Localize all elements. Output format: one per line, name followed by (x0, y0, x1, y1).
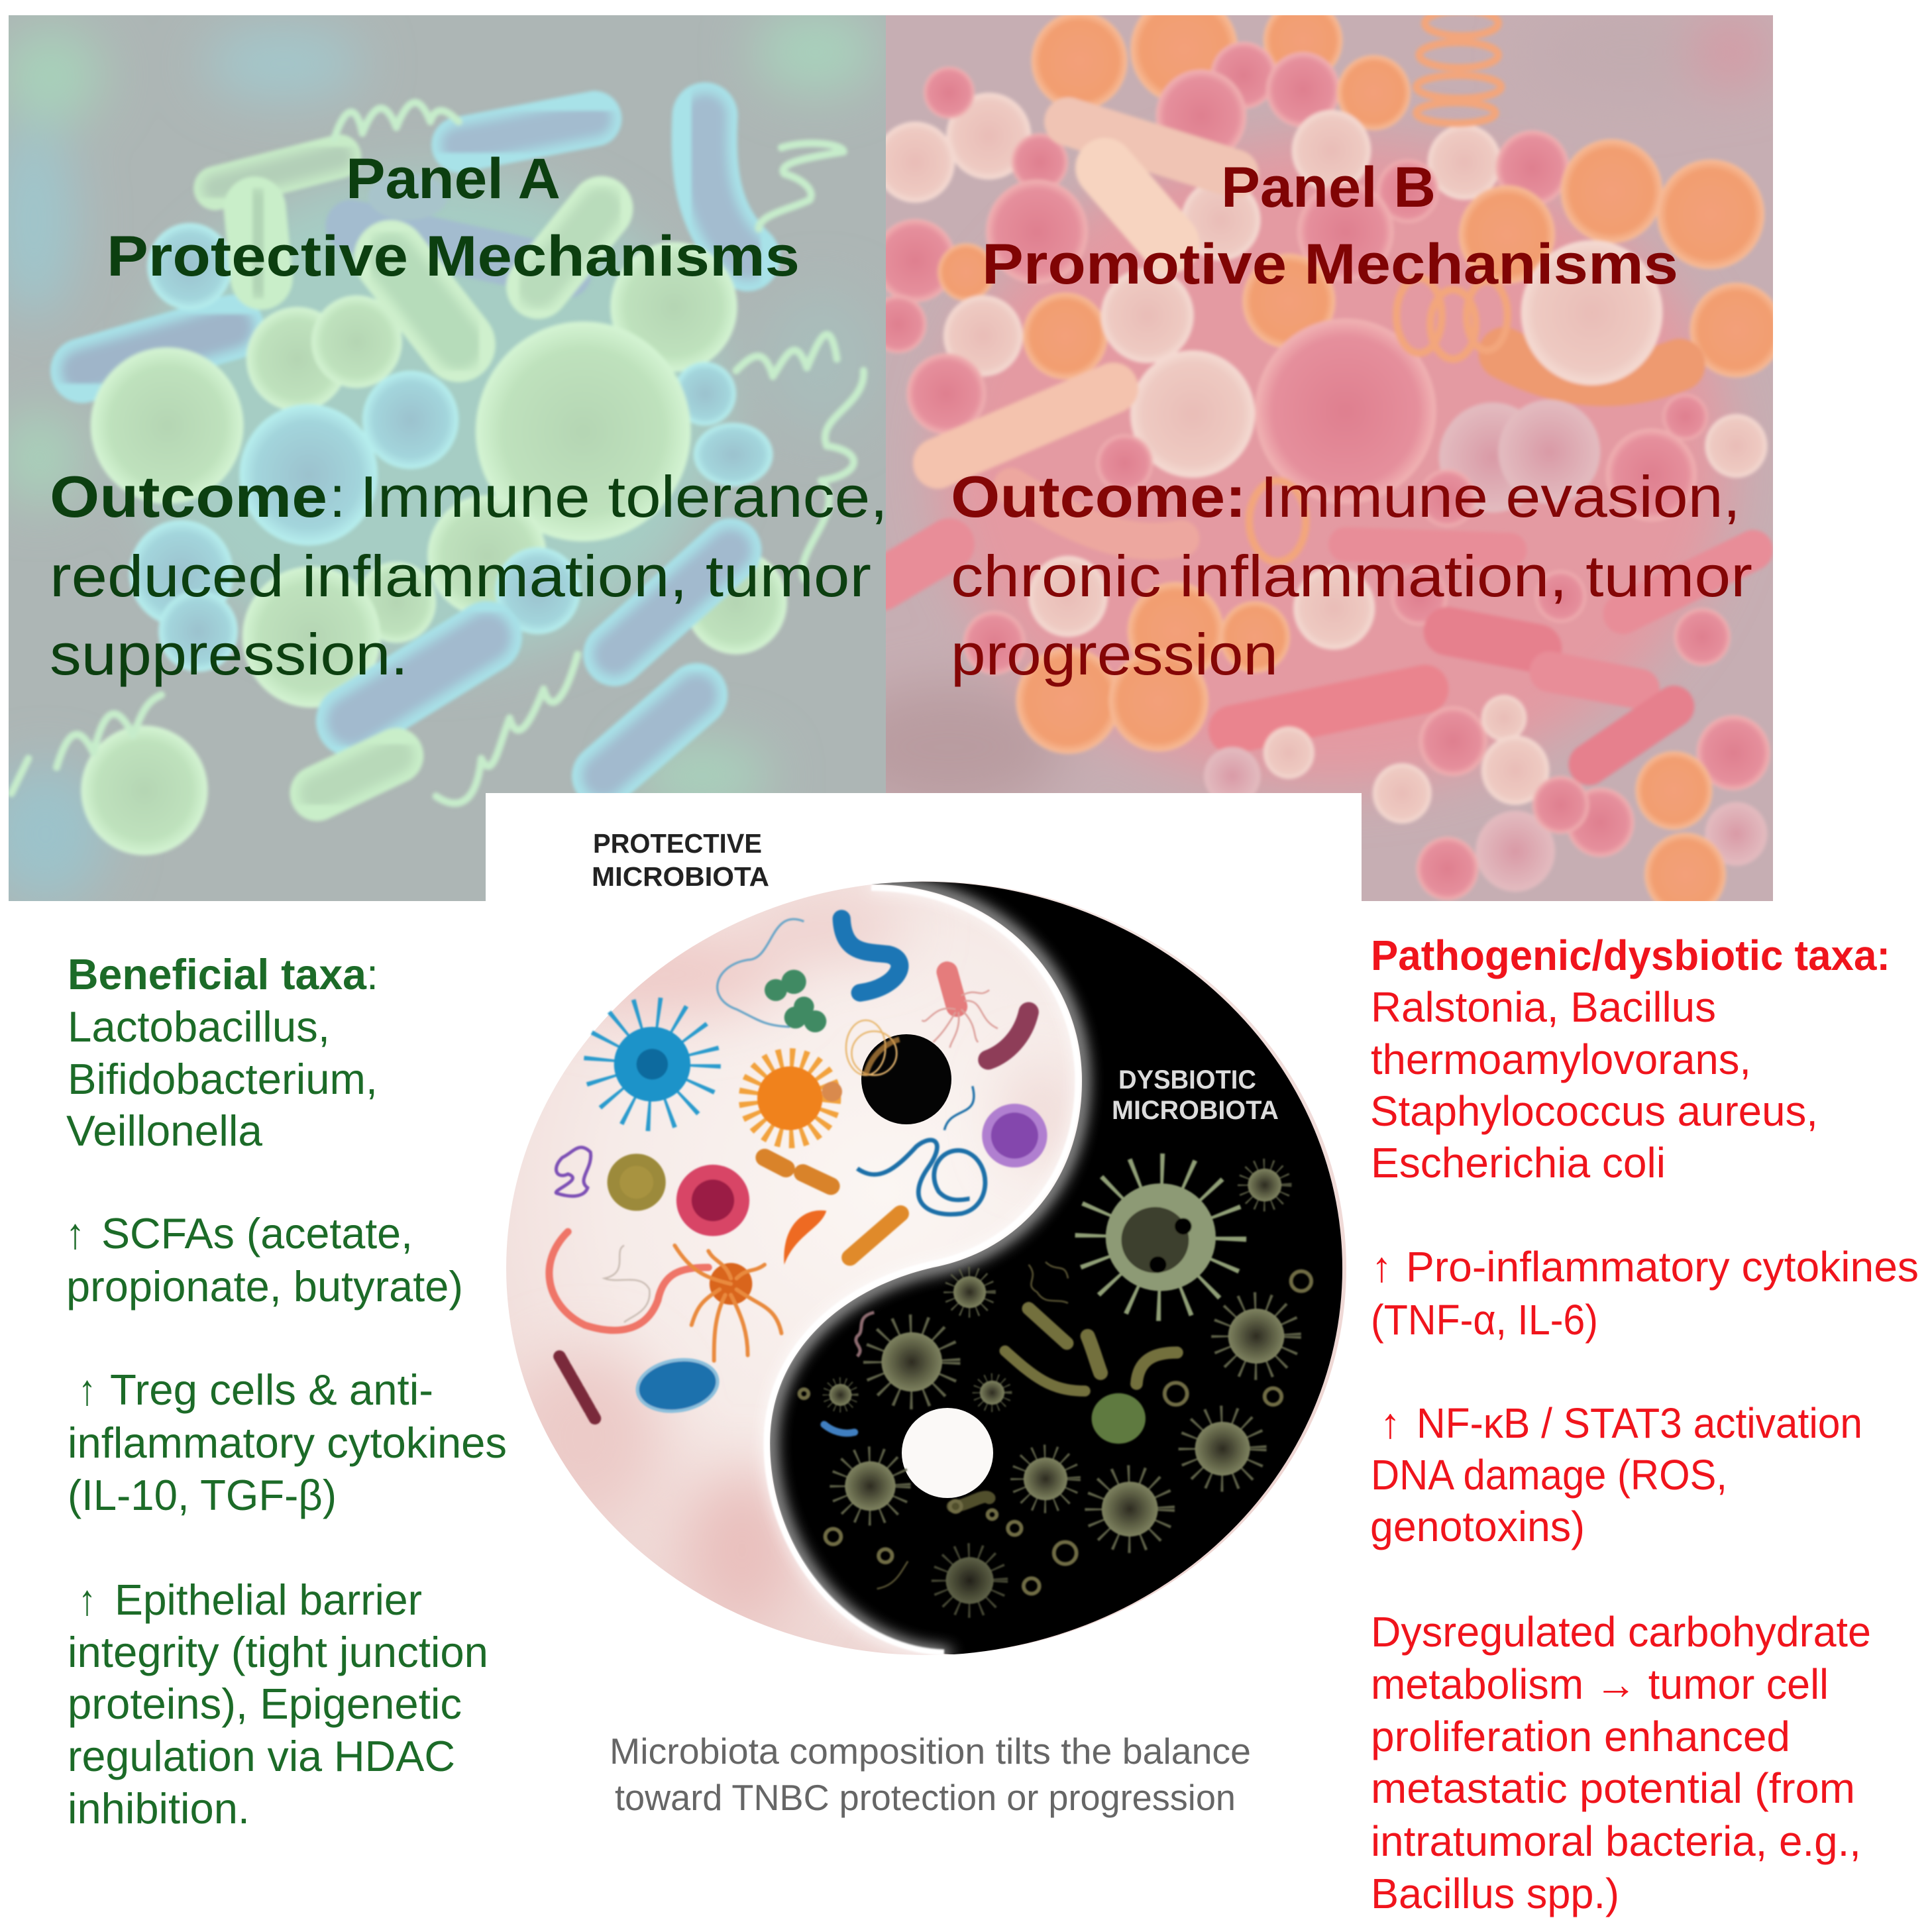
dysbiotic half base (767, 882, 1342, 1654)
right column: promotive mechanisms list: ↑ (1380, 1399, 1401, 1447)
microbes on dysbiotic side (800, 1165, 1311, 1609)
Panel B heading (982, 156, 1678, 296)
right column: promotive mechanisms list: Escherichia coli (1371, 1139, 1666, 1187)
Panel B heading: Promotive Mechanisms (982, 233, 1678, 296)
left column: protective mechanisms list: SCFAs (acetate, (101, 1209, 413, 1258)
right column: promotive mechanisms list: metabolism → tumor cell (1371, 1660, 1829, 1708)
Panel A outcome text: suppression. (50, 621, 408, 687)
left column: protective mechanisms list: ↑ (78, 1366, 96, 1414)
left column: protective mechanisms list (66, 950, 507, 1833)
Panel B outcome text: progression (951, 621, 1278, 687)
Panel A heading (107, 147, 800, 288)
right column: promotive mechanisms list: DNA damage (ROS, (1371, 1451, 1727, 1499)
right column: promotive mechanisms list: thermoamylovorans, (1371, 1036, 1751, 1083)
Panel B outcome text: Immune evasion, (1260, 464, 1741, 529)
left column: protective mechanisms list: proteins), Epigenetic (68, 1680, 462, 1728)
eye: black dot (861, 1034, 951, 1124)
right column: promotive mechanisms list: ↑ (1371, 1243, 1392, 1291)
right column: promotive mechanisms list: Ralstonia, Bacillus (1371, 983, 1716, 1031)
Panel B outcome text: Outcome: (951, 464, 1246, 529)
Panel A outcome text: Immune tolerance, (360, 464, 888, 529)
microbes on protective side (549, 919, 1047, 1419)
eye: white dot (902, 1408, 993, 1498)
protective half base (504, 881, 1346, 1655)
label: dysbiotic microbiota: MICROBIOTA (1112, 1096, 1279, 1125)
left column: protective mechanisms list: : (366, 950, 378, 998)
Panel A heading: Panel A (346, 147, 561, 211)
left column: protective mechanisms list: Treg cells & anti- (110, 1366, 433, 1414)
label: dysbiotic microbiota: DYSBIOTIC (1118, 1065, 1256, 1095)
right column: promotive mechanisms list: Pathogenic/dysbiotic taxa: (1371, 932, 1890, 979)
right column: promotive mechanisms list: Pro-inflammatory cytokines (1406, 1243, 1919, 1291)
left column: protective mechanisms list: Epithelial barrier (115, 1576, 422, 1624)
right column: promotive mechanisms list: genotoxins) (1370, 1503, 1585, 1550)
Panel B heading: Panel B (1221, 156, 1436, 219)
left column: protective mechanisms list: Beneficial taxa (68, 950, 367, 998)
left column: protective mechanisms list: Veillonella (66, 1106, 263, 1155)
right column: promotive mechanisms list: (TNF-α, IL-6) (1371, 1296, 1598, 1344)
caption (610, 1731, 1251, 1818)
caption: toward TNBC protection or progression (615, 1777, 1236, 1818)
right column: promotive mechanisms list: Dysregulated carbohydrate (1371, 1608, 1871, 1656)
label: dysbiotic microbiota (1112, 1065, 1279, 1125)
right column: promotive mechanisms list: Staphylococcus aureus, (1370, 1087, 1818, 1135)
left column: protective mechanisms list: Bifidobacterium, (68, 1055, 378, 1103)
left column: protective mechanisms list: propionate, butyrate) (66, 1262, 463, 1311)
right column: promotive mechanisms list: intratumoral bacteria, e.g., (1371, 1817, 1861, 1865)
left column: protective mechanisms list: inhibition. (68, 1784, 250, 1833)
left column: protective mechanisms list: inflammatory cytokines (68, 1419, 507, 1467)
Panel A outcome text (50, 464, 888, 687)
central white panel (486, 793, 1362, 906)
Panel A outcome text: reduced inflammation, tumor (50, 543, 871, 609)
label: protective microbiota: PROTECTIVE (593, 828, 762, 859)
Panel A outcome text: : (329, 464, 345, 529)
right column: promotive mechanisms list: metastatic potential (from (1371, 1764, 1855, 1812)
left column: protective mechanisms list: Lactobacillus, (68, 1002, 330, 1051)
left column: protective mechanisms list: (IL-10, TGF-β) (68, 1471, 337, 1519)
Panel A outcome text: Outcome (50, 464, 327, 529)
Panel A heading: Protective Mechanisms (107, 225, 800, 288)
caption: Microbiota composition tilts the balance (610, 1731, 1251, 1772)
Panel B outcome text (951, 464, 1752, 687)
label: protective microbiota (592, 828, 769, 892)
panel A: protective mechanisms background (0, 11, 886, 903)
left column: protective mechanisms list: ↑ (66, 1209, 85, 1258)
right column: promotive mechanisms list: proliferation enhanced (1371, 1713, 1790, 1760)
panel B: promotive mechanisms background (836, 0, 1783, 916)
right column: promotive mechanisms list (1370, 932, 1919, 1917)
label: protective microbiota: MICROBIOTA (592, 861, 769, 892)
yin-yang microbiota diagram (504, 828, 1346, 1655)
right column: promotive mechanisms list: Bacillus spp.) (1371, 1870, 1619, 1917)
left column: protective mechanisms list: ↑ (78, 1576, 96, 1624)
Panel B outcome text: chronic inflammation, tumor (951, 543, 1752, 609)
left column: protective mechanisms list: regulation via HDAC (68, 1732, 455, 1780)
left column: protective mechanisms list: integrity (tight junction (68, 1628, 488, 1676)
right column: promotive mechanisms list: NF-κB / STAT3 activation (1417, 1399, 1862, 1447)
